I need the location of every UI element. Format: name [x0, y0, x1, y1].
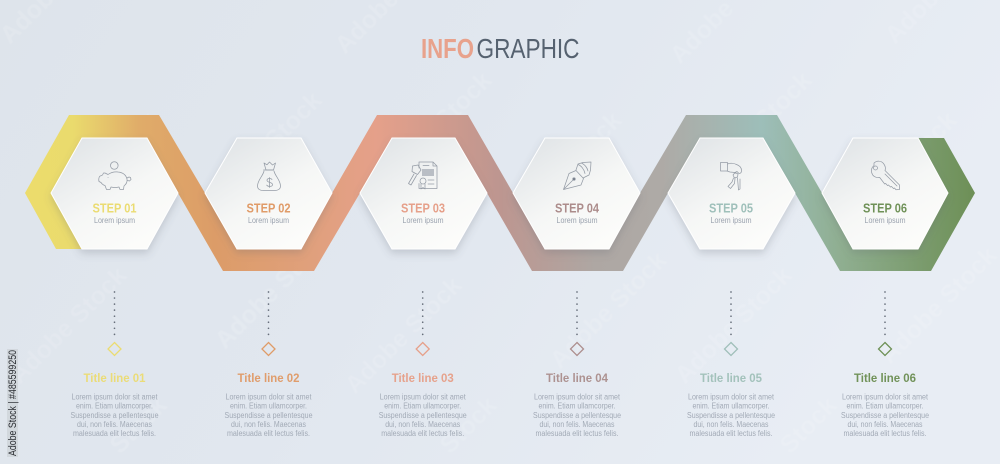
icon: gavel and certificate [408, 162, 437, 189]
marker diamond [108, 342, 121, 356]
watermark pattern: Adobe Stock [369, 66, 497, 194]
body text: dui, non felis. Maecenas [231, 420, 306, 429]
body text: enim. Etiam ullamcorper. [538, 402, 616, 410]
column 1 description [70, 292, 158, 438]
body text: enim. Etiam ullamcorper. [230, 402, 307, 410]
body text: malesuada elit lectus felis. [227, 429, 310, 438]
body text [687, 392, 775, 438]
title: INFO [421, 33, 474, 64]
watermark pattern: Adobe Stock [834, 106, 962, 234]
title line: Title line 03 [392, 371, 454, 385]
column 2 description [224, 292, 312, 438]
body text: malesuada elit lectus felis. [690, 429, 772, 438]
label: lorem ipsum: Lorem ipsum [402, 216, 444, 225]
watermark pattern: Adobe Stock [544, 246, 672, 374]
watermark pattern: Adobe Stock [499, 106, 627, 234]
label: lorem ipsum: Lorem ipsum [864, 216, 906, 225]
body text: enim. Etiam ullamcorper. [846, 402, 924, 410]
body text [841, 392, 929, 438]
label: lorem ipsum: Lorem ipsum [94, 216, 135, 225]
body text: Lorem ipsum dolor sit amet [842, 392, 929, 402]
marker diamond [262, 342, 275, 356]
body text: dui, non felis. Maecenas [540, 420, 615, 429]
icon: money bag [258, 162, 280, 190]
body text: malesuada elit lectus felis. [536, 429, 618, 438]
body text [70, 392, 158, 438]
label: step 04: STEP 04 [555, 202, 599, 216]
body text [533, 392, 621, 438]
watermark pattern: Stock [104, 391, 172, 459]
watermark pattern: Adobe Stock [34, 106, 162, 234]
body text: dui, non felis. Maecenas [77, 420, 152, 429]
step 6 hexagon [822, 138, 948, 249]
column 4 description [533, 292, 621, 438]
column 6 description [841, 292, 929, 438]
body text: Suspendisse a pellentesque [70, 411, 158, 420]
marker diamond [878, 342, 892, 356]
body text: Suspendisse a pellentesque [224, 411, 312, 420]
body text: enim. Etiam ullamcorper. [76, 402, 153, 410]
watermark pattern: Adobe Stock [199, 86, 327, 214]
watermark pattern: Adobe Stock [669, 261, 797, 389]
body text: Suspendisse a pellentesque [379, 411, 467, 420]
watermark pattern: Adobe Stock [4, 261, 132, 389]
label: step 03: STEP 03 [401, 202, 445, 216]
body text [224, 392, 312, 438]
body text: Lorem ipsum dolor sit amet [380, 392, 466, 402]
title: GRAPHIC [476, 33, 580, 64]
stock id label: Adobe Stock | #485599250 [7, 350, 19, 456]
title line: Title line 04 [546, 371, 608, 385]
icon: piggy bank [99, 162, 131, 190]
label: lorem ipsum: Lorem ipsum [710, 216, 752, 225]
label: lorem ipsum: Lorem ipsum [248, 216, 289, 225]
label: step 06: STEP 06 [863, 202, 907, 216]
body text: dui, non felis. Maecenas [848, 420, 923, 429]
body text: enim. Etiam ullamcorper. [384, 402, 461, 410]
title line: Title line 02 [238, 371, 300, 385]
label: lorem ipsum: Lorem ipsum [556, 216, 598, 225]
body text: malesuada elit lectus felis. [381, 429, 464, 438]
watermark pattern: Adobe Stock [339, 271, 467, 399]
title line: Title line 05 [700, 371, 762, 385]
step 2 hexagon [205, 138, 332, 249]
watermark pattern: Stock [434, 391, 502, 459]
watermark pattern: Adobe Stock [689, 66, 817, 194]
icon: fountain pen nib [564, 162, 591, 190]
body text: dui, non felis. Maecenas [694, 420, 769, 429]
body text: malesuada elit lectus felis. [844, 429, 926, 438]
body text: Lorem ipsum dolor sit amet [226, 392, 312, 402]
watermark pattern: Adobe Stock [209, 226, 337, 354]
marker diamond [724, 342, 738, 356]
title line: Title line 06 [854, 371, 916, 385]
column 3 description [379, 292, 467, 438]
zigzag ribbon [25, 115, 975, 271]
label: step 02: STEP 02 [246, 202, 291, 216]
title [421, 33, 580, 64]
label: step 01: STEP 01 [92, 202, 137, 216]
body text: Suspendisse a pellentesque [533, 411, 621, 420]
column 5 description [687, 292, 775, 438]
body text: Suspendisse a pellentesque [841, 411, 929, 420]
watermark pattern: Adobe Stock [874, 241, 1000, 369]
step 4 hexagon [513, 138, 640, 249]
body text: dui, non felis. Maecenas [385, 420, 460, 429]
marker diamond [416, 342, 429, 356]
body text: Lorem ipsum dolor sit amet [72, 392, 158, 402]
label: step 05: STEP 05 [709, 202, 753, 216]
step 3 hexagon [360, 138, 487, 249]
body text: Suspendisse a pellentesque [687, 411, 775, 420]
body text: malesuada elit lectus felis. [73, 429, 156, 438]
title line: Title line 01 [84, 371, 146, 385]
body text: enim. Etiam ullamcorper. [692, 402, 770, 410]
marker diamond [570, 342, 584, 356]
step 1 hexagon [51, 138, 178, 249]
watermark pattern: Stock [774, 391, 842, 459]
icon: hand holding keys [720, 162, 742, 190]
icon: key [871, 161, 900, 190]
body text: Lorem ipsum dolor sit amet [534, 392, 621, 402]
body text: Lorem ipsum dolor sit amet [688, 392, 775, 402]
step 5 hexagon [668, 138, 795, 249]
body text [379, 392, 467, 438]
